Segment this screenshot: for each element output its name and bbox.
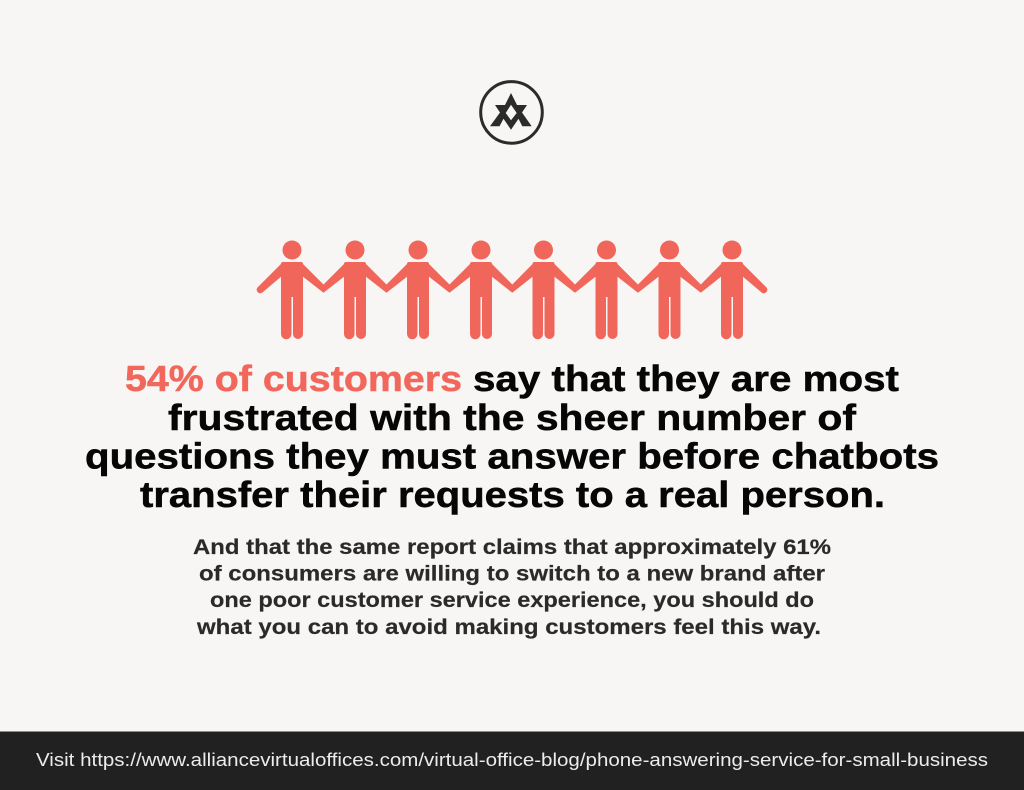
- text block: supporting paragraph: [193, 536, 831, 639]
- text block: supporting paragraph: And that the same report claims that approximately 61%: [193, 536, 831, 559]
- icon: person 3: [407, 240, 472, 339]
- heading: frustrated with the sheer number of: [168, 397, 857, 438]
- heading: transfer their requests to a real person.: [140, 474, 885, 515]
- text block: supporting paragraph: what you can to avoid making customers feel this way.: [196, 616, 821, 639]
- icon: person 2: [344, 240, 409, 339]
- icon: person 1: [257, 240, 346, 339]
- text block: supporting paragraph: of consumers are willing to switch to a new brand after: [199, 563, 825, 586]
- heading: questions they must answer before chatbots: [85, 436, 939, 476]
- footer link text: Visit https://www.alliancevirtualoffices.com/virtual-office-blog/phone-answering-service-for-small-business: [36, 750, 988, 770]
- icon: person 6: [596, 240, 660, 339]
- heading: [85, 358, 939, 515]
- icon: person 4: [470, 240, 534, 339]
- chart: row of people holding hands: [257, 240, 767, 339]
- heading: say that they are most: [473, 358, 899, 399]
- text block: supporting paragraph: one poor customer service experience, you should do: [210, 589, 814, 612]
- icon: person 5: [532, 240, 598, 339]
- icon: person 7: [658, 240, 723, 339]
- icon: person 8: [721, 240, 767, 339]
- heading: 54% of customers: [125, 358, 462, 399]
- icon: logo: [481, 82, 542, 143]
- footer bar: [0, 732, 1024, 790]
